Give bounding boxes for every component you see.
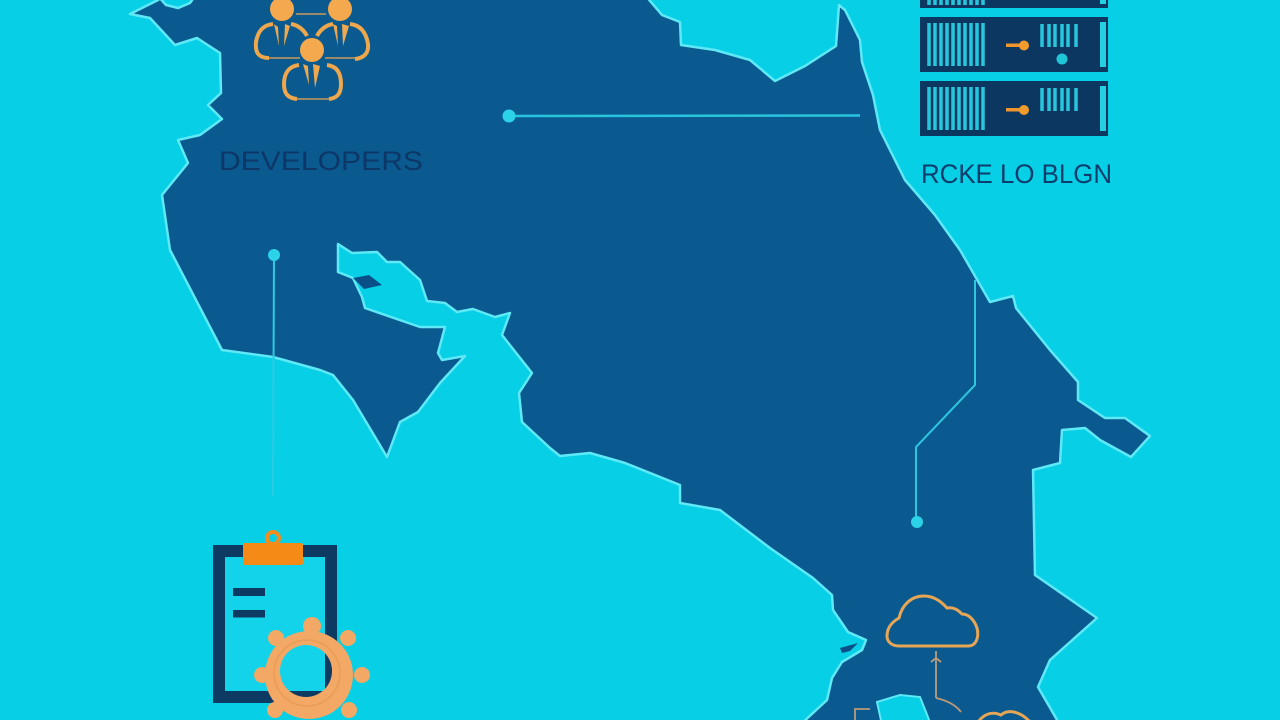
icon: developers: [256, 0, 368, 99]
map landmass: [130, 0, 1150, 720]
icon: clipboard with gear: [219, 532, 370, 719]
heading: server label: RCKE LO BLGN: [921, 159, 1112, 189]
inlet hole: [353, 275, 382, 289]
icon: cloud link arrow: [855, 651, 961, 720]
icon: cloud: [887, 596, 978, 646]
connector line: right: [911, 280, 975, 528]
connector line: left: [268, 249, 280, 496]
heading: developers: DEVELOPERS: [219, 146, 423, 176]
top-left islet: [158, 0, 195, 8]
icon: lower cloud: [978, 712, 1030, 720]
icon: gear: [254, 617, 370, 719]
icon: server racks: [920, 0, 1108, 136]
connector line: top: [502, 110, 860, 122]
southern bay: [877, 695, 931, 720]
eastern slit: [840, 643, 858, 653]
